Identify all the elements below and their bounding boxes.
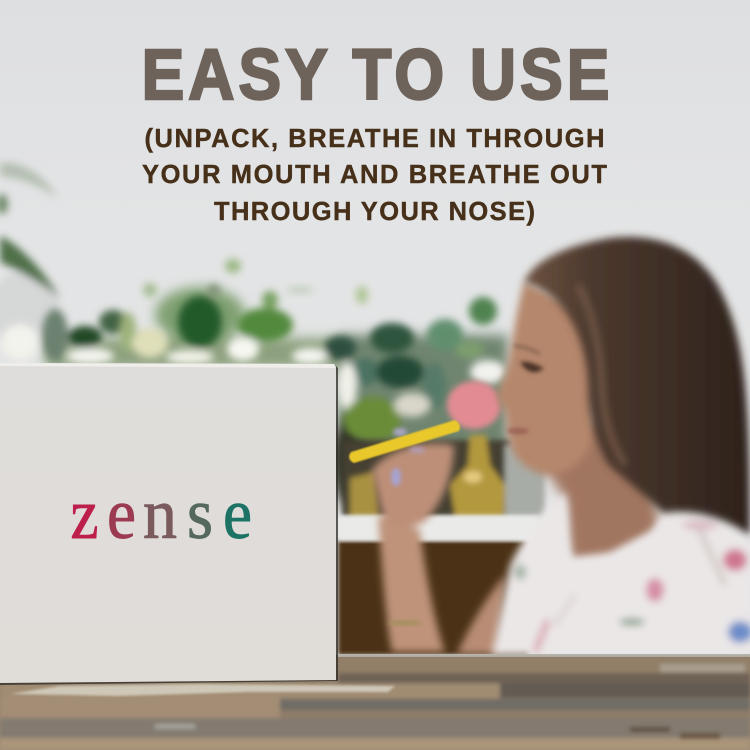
title: EASY TO USE xyxy=(142,36,613,115)
vases on shelf xyxy=(342,435,545,516)
zense logo: n xyxy=(143,474,177,554)
neck xyxy=(540,420,660,565)
hair xyxy=(524,237,750,535)
left bouquet xyxy=(42,309,68,361)
bracelet xyxy=(388,620,422,626)
left palm leaves xyxy=(0,163,60,350)
yellow inhaler xyxy=(349,420,460,463)
subtitle: THROUGH YOUR NOSE) xyxy=(214,198,535,226)
zense logo: z xyxy=(70,474,98,554)
shelf and cabinet xyxy=(338,516,538,655)
blouse xyxy=(492,493,750,655)
wooden table xyxy=(0,654,750,750)
subtitle: (UNPACK, BREATHE IN THROUGH xyxy=(144,125,604,153)
far arm xyxy=(457,575,505,654)
zense logo xyxy=(70,474,252,554)
right bouquet xyxy=(469,297,497,325)
face xyxy=(497,282,600,474)
zense logo: e xyxy=(223,474,252,554)
flower arrangement xyxy=(1,259,508,505)
pink rose xyxy=(447,381,501,429)
zense logo: s xyxy=(187,474,213,554)
near arm and hand xyxy=(372,443,454,652)
woman xyxy=(372,237,750,655)
subtitle: YOUR MOUTH AND BREATHE OUT xyxy=(142,161,607,189)
nails xyxy=(391,428,425,486)
subtitle xyxy=(142,125,607,226)
zense logo: e xyxy=(107,474,136,554)
eye and lips xyxy=(507,346,544,434)
white zense box xyxy=(0,363,338,685)
